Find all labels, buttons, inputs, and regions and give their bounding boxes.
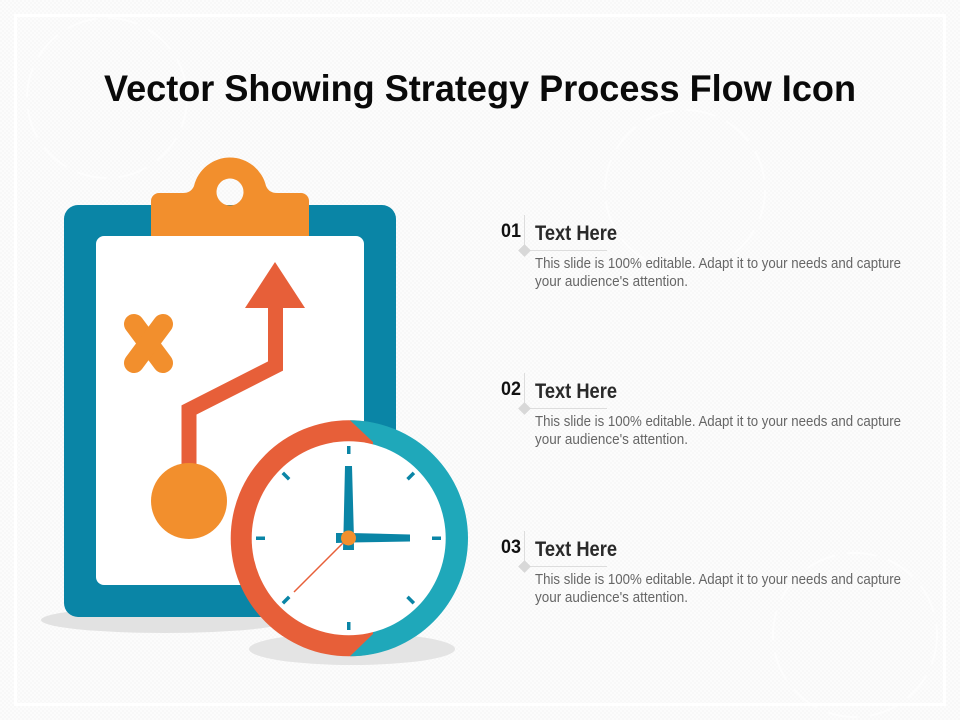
heading 01: Text Here xyxy=(535,222,617,245)
number 03: 03 xyxy=(501,537,521,558)
icon: clipboard with strategy plan xyxy=(41,158,396,633)
arrow: strategy path xyxy=(189,262,305,475)
number 01: 01 xyxy=(501,221,521,242)
title: Vector Showing Strategy Process Flow Icon xyxy=(104,68,856,109)
description 02: your audience's attention. xyxy=(535,431,688,448)
text block 01 xyxy=(501,215,901,290)
heading 02: Text Here xyxy=(535,380,617,403)
clock ring teal xyxy=(350,420,468,656)
clipboard shadow xyxy=(41,607,289,633)
icon: X mark xyxy=(134,324,163,363)
start point circle xyxy=(151,463,227,539)
description 03: This slide is 100% editable. Adapt it to your needs and capture xyxy=(535,571,901,588)
clipboard board xyxy=(64,205,396,617)
text block 02 xyxy=(501,373,901,448)
text block 03 xyxy=(501,531,901,606)
clock ticks xyxy=(256,446,441,630)
description 01: This slide is 100% editable. Adapt it to your needs and capture xyxy=(535,255,901,272)
clock ring coral xyxy=(231,420,467,656)
clipboard clip xyxy=(151,158,309,236)
clock hands xyxy=(294,466,410,592)
number 02: 02 xyxy=(501,379,521,400)
description 01: your audience's attention. xyxy=(535,273,688,290)
clipboard paper xyxy=(96,236,364,585)
clock shadow xyxy=(249,633,455,665)
description 02: This slide is 100% editable. Adapt it to your needs and capture xyxy=(535,413,901,430)
icon: clock xyxy=(231,420,468,665)
clock face xyxy=(252,441,446,635)
heading 03: Text Here xyxy=(535,538,617,561)
description 03: your audience's attention. xyxy=(535,589,688,606)
